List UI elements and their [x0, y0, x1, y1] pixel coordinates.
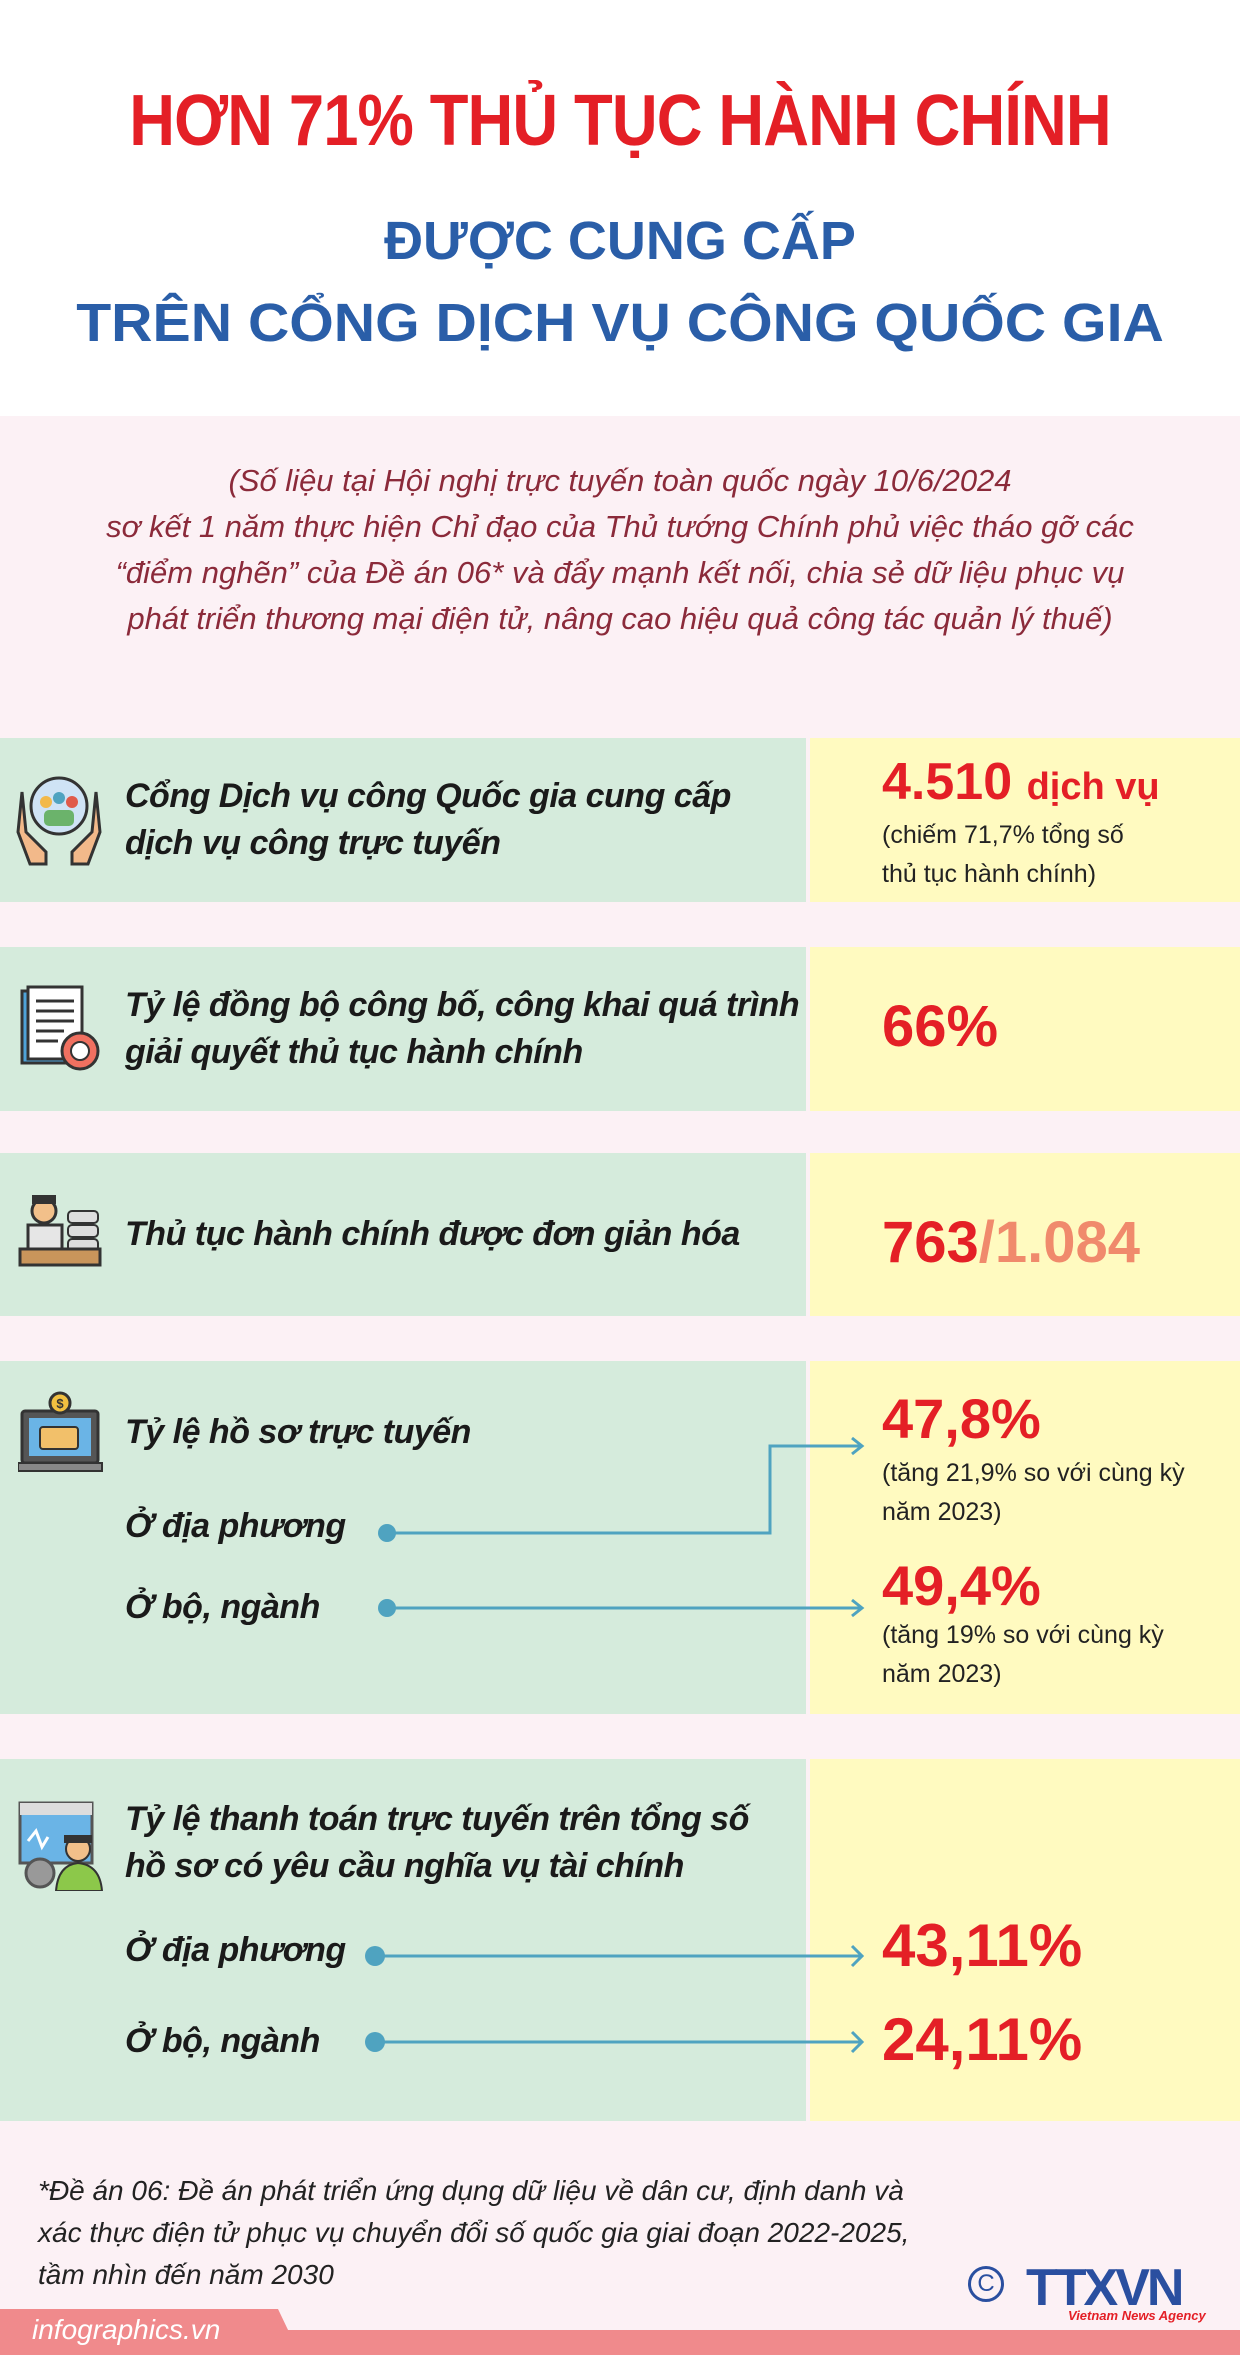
label: giải quyết thủ tục hành chính [125, 1033, 583, 1071]
source tab [0, 2309, 288, 2330]
subtitle title: TRÊN CỔNG DỊCH VỤ CÔNG QUỐC GIA [76, 293, 1164, 353]
panel 3 [0, 1153, 1240, 1316]
note: năm 2023) [882, 1660, 1002, 1688]
label: local: Ở địa phương [125, 1931, 346, 1969]
bottom band [0, 2330, 1240, 2355]
value: 4.510 dịch vụ [882, 753, 1160, 811]
arrows [378, 1436, 864, 1618]
note [882, 1621, 1164, 1688]
logo: TTXVN: TTXVN [1026, 2259, 1181, 2317]
label [125, 1800, 751, 1885]
value: 24,11%: 24,11% [882, 2006, 1082, 2073]
label: ministries: Ở bộ, ngành [125, 1588, 320, 1626]
note: thủ tục hành chính) [882, 860, 1096, 888]
label: Tỷ lệ đồng bộ công bố, công khai quá trình [125, 986, 799, 1024]
label: Tỷ lệ hồ sơ trực tuyến [125, 1413, 471, 1451]
arrows [365, 1945, 864, 2053]
label: local: Ở địa phương [125, 1507, 346, 1545]
label: Cổng Dịch vụ công Quốc gia cung cấp [125, 777, 731, 815]
note: (chiếm 71,7% tổng số [882, 821, 1124, 849]
footnote: xác thực điện tử phục vụ chuyển đổi số quốc gia giai đoạn 2022-2025, [38, 2217, 909, 2248]
value: 66% [882, 994, 998, 1059]
value: 47,8%: 47,8% [882, 1387, 1041, 1450]
label: Tỷ lệ thanh toán trực tuyến trên tổng số [125, 1800, 749, 1838]
footnote [37, 2175, 909, 2290]
icon: hands with people [16, 776, 102, 866]
panel 2 [0, 947, 1240, 1111]
intro text: “điểm nghẽn” của Đề án 06* và đẩy mạnh kết nối, chia sẻ dữ liệu phục vụ [116, 555, 1124, 590]
label: dịch vụ công trực tuyến [125, 824, 500, 862]
label: hồ sơ có yêu cầu nghĩa vụ tài chính [125, 1847, 684, 1885]
value: 49,4%: 49,4% [882, 1554, 1041, 1617]
note [882, 821, 1124, 888]
note: năm 2023) [882, 1498, 1002, 1526]
footnote: tầm nhìn đến năm 2030 [38, 2259, 334, 2290]
intro text: phát triển thương mại điện tử, nâng cao hiệu quả công tác quản lý thuế) [127, 601, 1113, 636]
label: Thủ tục hành chính được đơn giản hóa [125, 1215, 740, 1253]
note [882, 1459, 1185, 1526]
label [124, 986, 799, 1071]
intro text [106, 463, 1134, 636]
icon: laptop with coin [18, 1392, 103, 1472]
panel 5 [0, 1759, 1240, 2121]
label [125, 777, 731, 862]
icon: laptop with coin: $ [56, 1396, 64, 1411]
logo: TTXVN: Vietnam News Agency [1068, 2308, 1206, 2323]
value: 43,11%: 43,11% [882, 1912, 1082, 1979]
icon: person at desk with server [18, 1195, 102, 1266]
note: (tăng 21,9% so với cùng kỳ [882, 1459, 1185, 1487]
header background [0, 0, 1240, 416]
intro text: (Số liệu tại Hội nghị trực tuyến toàn quốc ngày 10/6/2024 [228, 463, 1012, 498]
value: 763/1.084 [882, 1210, 1140, 1275]
label: ministries: Ở bộ, ngành [125, 2022, 320, 2060]
source text: infographics.vn [32, 2314, 220, 2345]
icon: document with gear [20, 986, 100, 1070]
logo: TTXVN [968, 2259, 1206, 2323]
logo: TTXVN: C [977, 2270, 995, 2297]
icon: screen with person [18, 1802, 103, 1891]
title: HƠN 71% THỦ TỤC HÀNH CHÍNH [129, 81, 1111, 161]
note: (tăng 19% so với cùng kỳ [882, 1621, 1164, 1649]
intro text: sơ kết 1 năm thực hiện Chỉ đạo của Thủ tướng Chính phủ việc tháo gỡ các [106, 509, 1134, 544]
subtitle title [76, 210, 1164, 353]
panel 1 [0, 738, 1240, 902]
footnote: *Đề án 06: Đề án phát triển ứng dụng dữ liệu về dân cư, định danh và [38, 2175, 904, 2206]
subtitle title: ĐƯỢC CUNG CẤP [384, 211, 856, 271]
panel 4 [0, 1361, 1240, 1714]
